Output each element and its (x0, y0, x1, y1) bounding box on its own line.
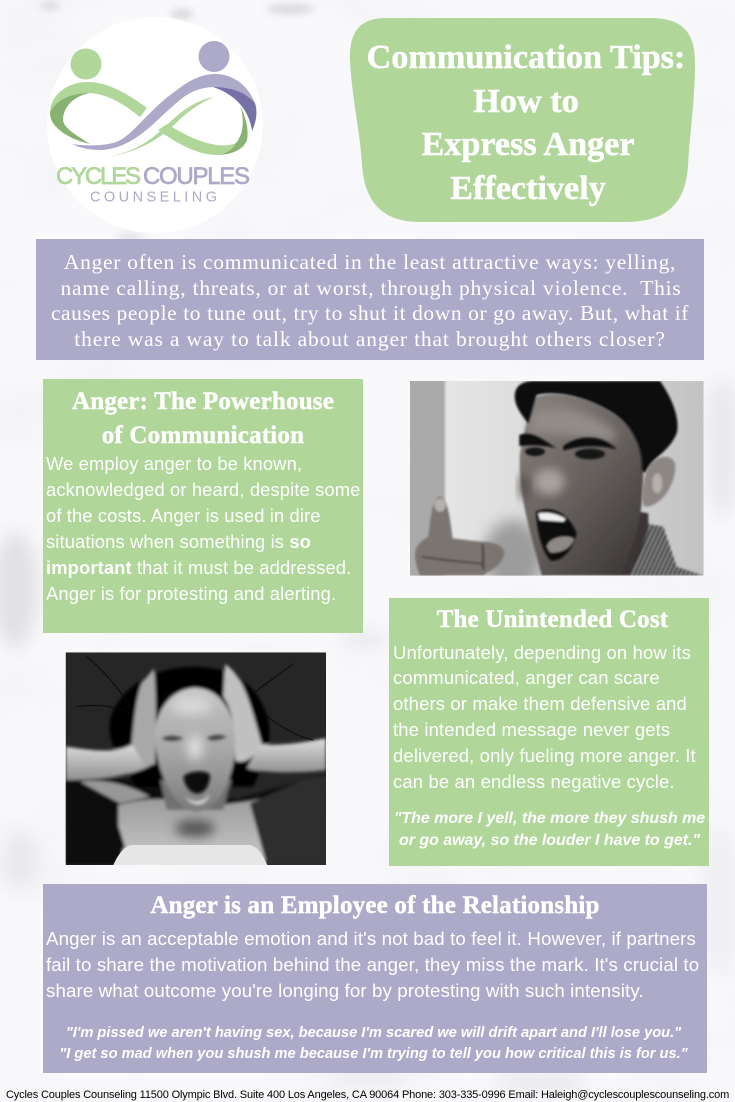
panel heading: The Unintended Cost (437, 606, 668, 633)
panel body text: Anger is an acceptable emotion and it's not bad to feel it. However, if partners (46, 928, 696, 948)
panel body text: situations when something is so (46, 531, 311, 552)
panel body text: Anger is for protesting and alerting. (46, 583, 336, 604)
intro panel: name calling, threats, or at worst, through physical violence. This (60, 276, 682, 300)
photo: angry man pointing (410, 381, 704, 576)
panel heading: Anger: The Powerhouse (72, 388, 334, 415)
intro panel: causes people to tune out, try to shut it down or go away. But, what if (51, 300, 689, 324)
logo: COUPLES (143, 163, 250, 190)
logo purple head (198, 41, 230, 72)
panel body text: We employ anger to be known, (46, 453, 302, 474)
title (367, 39, 685, 207)
panel body text (46, 453, 360, 604)
panel: anger is an employee of the relationship (43, 884, 707, 1073)
logo subtitle: COUNSELING (90, 190, 217, 206)
panel quote: "The more I yell, the more they shush me (394, 810, 705, 826)
panel body text: acknowledged or heard, despite some (46, 479, 360, 500)
logo white circle (47, 17, 263, 233)
panel body text: the intended message never gets (393, 719, 670, 740)
panel quote: or go away, so the louder I have to get." (399, 832, 700, 848)
panel body text: delivered, only fueling more anger. It (393, 745, 696, 766)
logo infinity symbol (50, 74, 256, 156)
title: Express Anger (421, 126, 635, 163)
intro panel (36, 239, 704, 360)
intro panel: Anger often is communicated in the least attractive ways: yelling, (64, 250, 676, 274)
logo wordmark: CYCLES (56, 163, 141, 190)
intro panel: there was a way to talk about anger that brought others closer? (74, 326, 666, 350)
panel quote (59, 1025, 688, 1062)
panel: the unintended cost (389, 598, 709, 866)
panel: the powerhouse of communication (43, 379, 363, 633)
panel quote: "I'm pissed we aren't having sex, because I'm scared we will drift apart and I'll lose you." (66, 1025, 681, 1041)
title panel (350, 18, 695, 222)
panel body text (46, 928, 699, 1001)
panel heading: Anger is an Employee of the Relationship (150, 892, 600, 919)
logo green head (70, 48, 102, 80)
panel body text: important that it must be addressed. (46, 557, 351, 578)
logo (49, 18, 262, 232)
panel body text (393, 642, 696, 792)
panel quote (394, 810, 705, 848)
panel quote: "I get so mad when you shush me because I'm trying to tell you how critical this is for us." (59, 1046, 688, 1062)
panel body text: others or make them defensive and (393, 693, 687, 714)
footer contact line: Cycles Couples Counseling 11500 Olympic Blvd. Suite 400 Los Angeles, CA 90064 Phone: 303-335-0996 Email: Haleigh@cyclescouplescounseling.com (6, 1089, 729, 1101)
panel heading (72, 388, 334, 449)
title: Communication Tips: (367, 39, 685, 76)
panel body text: of the costs. Anger is used in dire (46, 505, 321, 526)
title: How to (473, 83, 579, 120)
panel body text: Unfortunately, depending on how its (393, 642, 691, 662)
panel heading: of Communication (102, 422, 304, 449)
panel body text: share what outcome you're longing for by protesting with such intensity. (46, 980, 644, 1000)
panel body text: can be an endless negative cycle. (393, 771, 675, 792)
panel body text: communicated, anger can scare (393, 667, 660, 688)
photo: woman screaming with hands on ears (66, 652, 326, 865)
title: Effectively (450, 170, 606, 207)
panel body text: fail to share the motivation behind the anger, they miss the mark. It's crucial to (46, 954, 699, 974)
